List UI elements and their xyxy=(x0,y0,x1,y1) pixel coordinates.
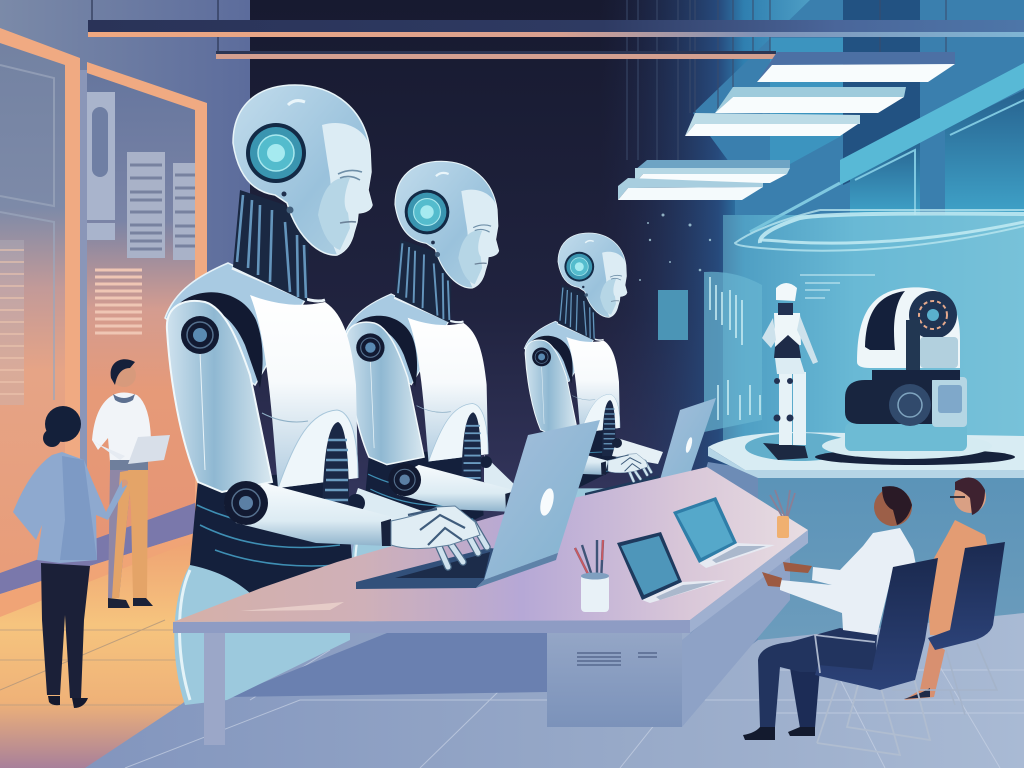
robot 1 hand xyxy=(391,506,487,567)
laptop 1 xyxy=(356,420,600,589)
table xyxy=(173,467,808,633)
pencil cup xyxy=(575,540,609,612)
robot 3 xyxy=(523,233,663,540)
robot 1 far arm xyxy=(347,488,425,526)
panel: small hologram sign xyxy=(658,290,688,340)
wall base orange strip xyxy=(0,533,195,617)
hologram ring xyxy=(735,210,1024,251)
panel: left wall xyxy=(0,0,250,595)
person: woman from behind xyxy=(13,406,128,708)
robot 1 xyxy=(165,85,396,705)
robot 3 hand xyxy=(608,454,651,481)
under-table shadow on floor xyxy=(227,633,547,697)
panel: right holographic room xyxy=(600,0,1024,480)
hologram robot figure xyxy=(762,283,818,460)
ceiling beams xyxy=(88,0,1024,160)
small laptop B xyxy=(673,497,775,568)
chart: hologram screen xyxy=(704,272,875,432)
warm lit floor xyxy=(0,530,195,768)
floor xyxy=(0,530,1024,768)
person: seated man in white shirt, chair xyxy=(743,486,938,755)
table leg xyxy=(204,633,225,745)
small laptop A xyxy=(617,532,726,603)
ceiling lights xyxy=(618,52,955,200)
panel: left glass door with frame xyxy=(0,28,80,590)
hologram machine xyxy=(822,287,992,459)
floor tile lines xyxy=(0,620,1024,768)
panel: second glass door with documents xyxy=(80,62,207,565)
platform with hologram exhibits xyxy=(690,432,1024,690)
person: standing man with laptop xyxy=(92,359,170,608)
cabinet under table xyxy=(547,552,790,727)
laptop 2 xyxy=(585,398,716,499)
person: seated man in orange, chair behind xyxy=(893,478,1005,715)
wall base band xyxy=(0,503,195,594)
robot 2 xyxy=(344,161,516,623)
orange pencil cup xyxy=(770,490,795,538)
